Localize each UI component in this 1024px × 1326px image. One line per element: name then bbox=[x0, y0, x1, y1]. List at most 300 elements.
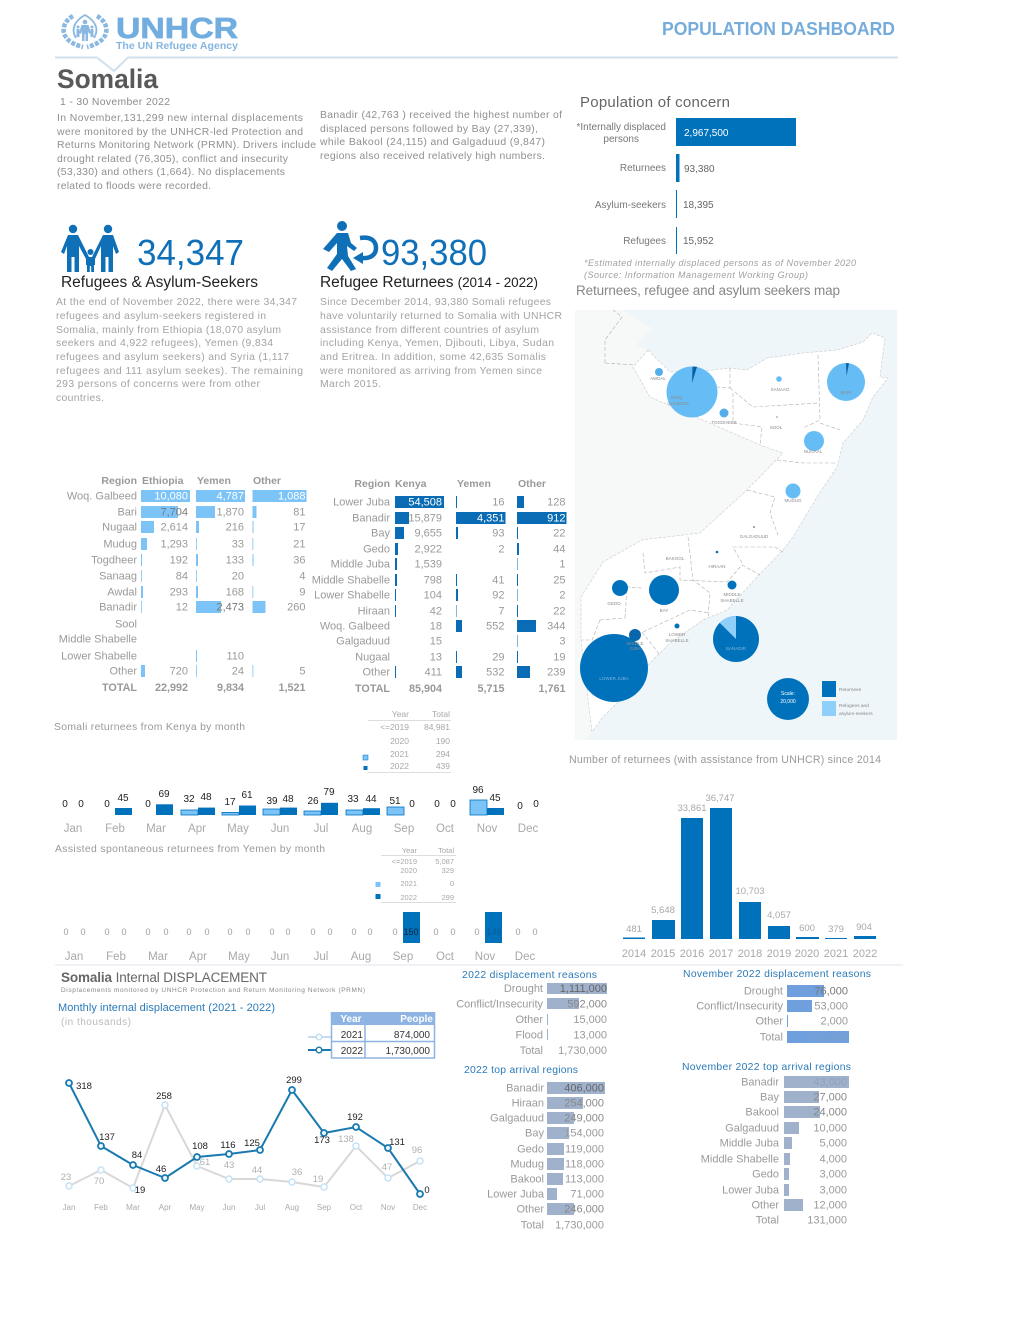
table: Yemen returnee totals: 299 bbox=[441, 893, 454, 902]
labels 2021: 61 bbox=[200, 1157, 210, 1168]
table header: Yemen bbox=[197, 475, 231, 487]
label: Sool bbox=[770, 416, 783, 430]
labels and values: Other bbox=[515, 1014, 543, 1026]
yearly value labels: 10,703 bbox=[735, 886, 765, 897]
text block: returnee description bbox=[319, 297, 562, 390]
bar value labels: 0 bbox=[434, 799, 440, 810]
bar value labels: 0 bbox=[532, 927, 538, 937]
bar value labels: 0 bbox=[121, 927, 127, 937]
text block: displacement summary: (53,330) and others (1,664). No displacements bbox=[57, 167, 285, 178]
table: Kenya returnee totals: 2022 bbox=[390, 761, 409, 771]
values: Ethiopia: 12 bbox=[176, 602, 188, 614]
bubble: Bay: BAY bbox=[660, 608, 668, 613]
region names: Banadir bbox=[352, 512, 390, 524]
chart title: returnees from Kenya: Somali returnees from Kenya by month bbox=[54, 722, 245, 733]
labels and values: Mudug bbox=[510, 1158, 544, 1170]
values: Ethiopia: 192 bbox=[170, 554, 188, 566]
big number: 34,347: 34,347 bbox=[137, 232, 244, 273]
table: Yemen returnee totals: 2022 bbox=[400, 893, 417, 902]
bar value labels: 0 bbox=[245, 927, 251, 937]
map legend: Refugees and bbox=[839, 703, 869, 709]
labels and values bbox=[487, 1082, 604, 1232]
year axis: 2017 bbox=[709, 948, 733, 960]
month axis: May bbox=[228, 951, 250, 963]
values: Yemen: 532 bbox=[486, 666, 504, 678]
bar value labels: 0 bbox=[285, 927, 291, 937]
table: Yemen returnee totals bbox=[376, 846, 456, 902]
values: Other: 19 bbox=[553, 652, 566, 664]
bar value labels: 0 bbox=[450, 799, 456, 810]
bubble: Togdheer: TOGDHEER bbox=[711, 420, 737, 425]
table: Yemen returnee totals: 0 bbox=[450, 879, 454, 888]
bar value labels: 150 bbox=[403, 927, 419, 937]
yearly table: Year bbox=[340, 1014, 362, 1025]
labels 2022: 84 bbox=[132, 1150, 142, 1161]
region names: Other bbox=[362, 666, 390, 678]
bar value labels: 149 bbox=[486, 927, 502, 937]
chart title: returnees since 2014: Number of returnees (with assistance from UNHCR) since 2014 bbox=[569, 754, 881, 766]
labels and values: Total bbox=[756, 1214, 779, 1226]
bars bbox=[787, 985, 849, 1043]
yearly value labels: 904 bbox=[856, 922, 872, 933]
region names: Gedo bbox=[363, 544, 390, 556]
chart title: returnees from Yemen: Assisted spontaneous returnees from Yemen by month bbox=[55, 844, 325, 855]
text block: arrival regions summary: while Bakool (24,115) and Galgaduud (9,847) bbox=[319, 137, 545, 148]
bar: internally displaced persons: persons bbox=[603, 134, 639, 145]
labels 2022: 108 bbox=[192, 1141, 208, 1152]
legend line 2021 bbox=[308, 1034, 331, 1040]
bubble: Middle Shabelle bbox=[720, 580, 744, 603]
bar value labels: 0 bbox=[186, 927, 192, 937]
bars bbox=[784, 1076, 849, 1211]
totals row: 1,761 bbox=[538, 683, 566, 695]
table: Kenya returnee totals bbox=[363, 709, 451, 772]
labels 2021: 70 bbox=[94, 1176, 104, 1187]
month axis: Jan bbox=[65, 951, 83, 963]
bubble: Hiraan: HIRAAN bbox=[708, 564, 726, 569]
region names: Other bbox=[109, 666, 137, 678]
table header bbox=[354, 478, 546, 490]
heading: internal displacement: Somalia Internal DISPLACEMENT bbox=[61, 970, 267, 985]
values: Yemen: 4,351 bbox=[477, 512, 504, 524]
labels and values: Galgaduud bbox=[725, 1122, 779, 1134]
labels and values: 2,000 bbox=[820, 1016, 848, 1028]
labels and values: 10,000 bbox=[813, 1122, 847, 1134]
bar: asylum-seekers: Asylum-seekers bbox=[595, 200, 666, 211]
labels 2021: 19 bbox=[135, 1185, 145, 1196]
text block: returnee description: were monitored as arriving from Yemen since bbox=[319, 366, 542, 377]
bar: refugees bbox=[623, 227, 714, 254]
bubble: Hiraan bbox=[708, 551, 726, 569]
labels 2021: 47 bbox=[382, 1162, 392, 1173]
text block: displacement summary bbox=[56, 113, 316, 192]
values: Ethiopia: 720 bbox=[170, 666, 188, 678]
label: Bakool: BAKOOL bbox=[666, 556, 685, 561]
labels and values: Other bbox=[516, 1204, 544, 1216]
region names: Awdal bbox=[107, 586, 137, 598]
region names: Togdheer bbox=[91, 554, 137, 566]
labels and values: Galgaduud bbox=[490, 1112, 544, 1124]
bar: returnees: 93,380 bbox=[684, 164, 715, 175]
labels 2022: 173 bbox=[314, 1135, 330, 1146]
bar value labels bbox=[63, 927, 538, 937]
totals row bbox=[102, 682, 306, 694]
scale bubble: 20,000 bbox=[780, 699, 796, 705]
region names: Banadir bbox=[99, 602, 137, 614]
month axis: Jun bbox=[271, 951, 289, 963]
month axis: Dec bbox=[413, 1203, 427, 1212]
bar value labels: 45 bbox=[117, 793, 129, 804]
labels and values: Other bbox=[755, 1016, 783, 1028]
bubble: Mudug: MUDUG bbox=[784, 498, 802, 503]
table: Kenya returnee totals: Total bbox=[432, 709, 450, 719]
region names: Sanaag bbox=[99, 570, 137, 582]
values: Other: 44 bbox=[553, 544, 566, 556]
labels and values: 24,000 bbox=[813, 1106, 847, 1118]
bar value labels: 0 bbox=[433, 927, 439, 937]
logo tagline: The UN Refugee Agency bbox=[116, 41, 238, 52]
subheading: PRMN source: Displacements monitored by UNHCR Protection and Return Monitoring Network (PRMN) bbox=[61, 987, 365, 994]
bar value labels: 26 bbox=[307, 796, 319, 807]
labels 2022: 0 bbox=[424, 1185, 430, 1196]
month axis: Feb bbox=[94, 1203, 108, 1212]
table: Kenya returnee totals: Year bbox=[392, 709, 409, 719]
text block: returnee description: assistance from different countries of asylum bbox=[320, 325, 539, 336]
bar value labels: 48 bbox=[200, 792, 212, 803]
labels and values: 1,111,000 bbox=[560, 983, 607, 995]
month axis: Mar bbox=[126, 1203, 140, 1212]
month axis: Aug bbox=[285, 1203, 299, 1212]
year axis: 2021 bbox=[824, 948, 848, 960]
bubble: Lower Juba bbox=[580, 634, 648, 702]
values: Ethiopia bbox=[154, 490, 188, 678]
labels and values: 76,000 bbox=[814, 986, 848, 998]
bar chart: returnees per year bbox=[622, 793, 877, 960]
panel: population of concern bbox=[576, 94, 796, 254]
bubble: Lower Shabelle: LOWER bbox=[669, 632, 686, 637]
month axis: Jul bbox=[255, 1203, 265, 1212]
labels and values: Lower Juba bbox=[487, 1188, 545, 1200]
region names: Woq. Galbeed bbox=[67, 490, 137, 502]
values: Yemen: 133 bbox=[226, 554, 244, 566]
yearly value labels: 5,648 bbox=[651, 905, 675, 916]
values: Other: 9 bbox=[299, 586, 306, 598]
text block: refugee description: At the end of November 2022, there were 34,347 bbox=[56, 297, 297, 308]
values: Yemen: 2 bbox=[498, 544, 504, 556]
legend line 2022 bbox=[308, 1047, 331, 1053]
map legend: Returnees bbox=[839, 687, 862, 693]
yearly table: 1,730,000 bbox=[386, 1046, 430, 1057]
values: Other: 21 bbox=[293, 538, 306, 550]
labels and values: Gedo bbox=[517, 1144, 544, 1156]
chart: 2022 displacement reasons bbox=[456, 970, 607, 1057]
bubble: Woqooyi Galbeed: WOQ. bbox=[671, 395, 683, 400]
month axis: Aug bbox=[351, 951, 371, 963]
text block: refugee description: Somalia, mainly from Ethiopia (18,070 asylum bbox=[56, 325, 281, 336]
labels 2022: 299 bbox=[286, 1075, 302, 1086]
month axis: Jan bbox=[64, 823, 82, 835]
yearly table: 2022 bbox=[341, 1046, 363, 1057]
text block: returnee description: and Eritrea. In addition, some 42,635 Somalis bbox=[320, 352, 546, 363]
labels and values: Bay bbox=[760, 1092, 779, 1104]
bubble: Togdheer bbox=[711, 408, 737, 425]
big number: 93,380: 93,380 bbox=[381, 232, 487, 273]
bubble: Awdal: AWDAL bbox=[650, 376, 666, 381]
table: Yemen returnee totals: 5,087 bbox=[435, 857, 454, 866]
bar value labels: 32 bbox=[183, 794, 195, 805]
text block: displacement summary: were monitored by the UNHCR-led Protection and bbox=[56, 127, 303, 138]
values: Other: 1 bbox=[559, 558, 566, 570]
year axis: 2015 bbox=[651, 948, 675, 960]
values: Other: 1,088 bbox=[278, 490, 306, 502]
year axis: 2018 bbox=[738, 948, 762, 960]
labels and values: Bakool bbox=[510, 1174, 544, 1186]
bar chart: Kenya returnees by month bbox=[62, 785, 539, 835]
table header: Region bbox=[101, 475, 137, 487]
bubble: Nugaal bbox=[804, 431, 824, 454]
month axis: Nov bbox=[381, 1203, 395, 1212]
bar: asylum-seekers: 18,395 bbox=[683, 200, 714, 211]
table: Kenya returnee totals: 294 bbox=[436, 749, 450, 759]
month axis: Aug bbox=[352, 823, 372, 835]
month axis: Apr bbox=[188, 823, 206, 835]
labels and values: Conflict/Insecurity bbox=[456, 998, 543, 1010]
labels 2021: 96 bbox=[412, 1145, 422, 1156]
values: Kenya: 54,508 bbox=[408, 496, 442, 508]
bar chart: Yemen returnees by month bbox=[63, 912, 538, 963]
month axis: Oct bbox=[436, 823, 455, 835]
bubble: Middle Juba: JUBA bbox=[629, 646, 641, 651]
scale bubble bbox=[767, 678, 809, 720]
region names: Middle Shabelle bbox=[59, 634, 137, 646]
bar value labels: 0 bbox=[104, 927, 110, 937]
bar value labels: 0 bbox=[450, 927, 456, 937]
values: Yemen: 1,870 bbox=[216, 506, 244, 518]
values: Yemen: 168 bbox=[226, 586, 244, 598]
labels and values: 13,000 bbox=[573, 1030, 607, 1042]
text block: displacement summary: In November,131,299 new internal displacements bbox=[57, 113, 303, 124]
bubble: Lower Shabelle: SHABELLE bbox=[665, 638, 689, 643]
labels and values: 254,000 bbox=[564, 1098, 604, 1110]
values: Other: 3 bbox=[559, 636, 566, 648]
chart title: 2022 top arrival regions bbox=[464, 1065, 578, 1076]
month axis: Oct bbox=[436, 951, 455, 963]
bar value labels: 48 bbox=[282, 794, 294, 805]
bubble: Woqooyi Galbeed: GALBEED bbox=[667, 401, 689, 406]
heading: refugee returnees: Refugee Returnees (2014 - 2022) bbox=[320, 274, 538, 291]
text block: returnee description: have voluntarily returned to Somalia with UNHCR bbox=[320, 311, 562, 322]
labels and values: Banadir bbox=[506, 1082, 544, 1094]
labels 2021: 43 bbox=[224, 1160, 234, 1171]
labels and values: 406,000 bbox=[564, 1082, 604, 1094]
region names: Nugaal bbox=[355, 652, 390, 664]
region names bbox=[312, 496, 391, 678]
values: Kenya: 9,655 bbox=[414, 528, 442, 540]
bubble: Middle Juba: MIDDLE bbox=[626, 641, 644, 646]
month axis: Sep bbox=[393, 951, 413, 963]
table: Kenya returnee totals: 439 bbox=[436, 761, 450, 771]
labels 2022: 125 bbox=[244, 1138, 260, 1149]
year axis: 2022 bbox=[853, 948, 877, 960]
values: Kenya: 798 bbox=[424, 574, 442, 586]
values: Yemen: 4,787 bbox=[216, 490, 244, 502]
labels and values bbox=[701, 1076, 847, 1226]
labels and values: 4,000 bbox=[819, 1154, 847, 1166]
text block: refugee description bbox=[56, 297, 303, 404]
values: Yemen: 16 bbox=[492, 496, 504, 508]
values: Yemen: 93 bbox=[492, 528, 504, 540]
bar: returnees: Returnees bbox=[620, 163, 666, 174]
month axis: Jan bbox=[63, 1203, 75, 1212]
bubble: Bari bbox=[827, 363, 865, 401]
yearly value labels: 600 bbox=[799, 923, 815, 934]
text block: refugee description: refugees and asylum seekers) and Syria (1,117 bbox=[56, 352, 289, 363]
labels and values: Drought bbox=[744, 986, 783, 998]
labels and values: Hiraan bbox=[512, 1098, 544, 1110]
values: Yemen bbox=[477, 496, 504, 678]
text block: returnee description: March 2015. bbox=[320, 379, 381, 390]
totals row: 22,992 bbox=[155, 682, 188, 694]
values: Yemen: 2,473 bbox=[216, 602, 244, 614]
panel: refugees and asylum-seekers bbox=[56, 225, 303, 404]
map legend bbox=[822, 681, 873, 717]
dashboard title: POPULATION DASHBOARD bbox=[662, 19, 895, 39]
chart: 2022 top arrival regions bbox=[464, 1065, 605, 1232]
bar value labels: 44 bbox=[365, 794, 377, 805]
month axis: May bbox=[227, 823, 249, 835]
footnote: estimates source: (Source: Information Management Working Group) bbox=[584, 270, 808, 280]
date range: 1 - 30 November 2022 bbox=[60, 97, 170, 108]
map legend: asylum-seekers bbox=[839, 711, 873, 717]
bar value labels: 0 bbox=[163, 927, 169, 937]
values: Kenya bbox=[408, 496, 442, 678]
bar value labels: 0 bbox=[227, 927, 233, 937]
icon: family bbox=[61, 225, 119, 272]
labels and values bbox=[456, 983, 607, 1057]
values: Yemen: 92 bbox=[492, 590, 504, 602]
bar value labels: 0 bbox=[63, 927, 69, 937]
table: Yemen returnee totals: 2021 bbox=[400, 879, 417, 888]
values: Yemen bbox=[216, 490, 244, 678]
month axis: May bbox=[189, 1203, 205, 1212]
labels and values: 249,000 bbox=[564, 1112, 604, 1124]
bar value labels: 51 bbox=[389, 796, 401, 807]
labels 2021: 19 bbox=[313, 1174, 323, 1185]
labels and values: 592,000 bbox=[567, 998, 607, 1010]
month axis: Mar bbox=[146, 823, 166, 835]
bubble: Sanaag: SANAAG bbox=[771, 387, 790, 392]
logo wordmark: UNHCR bbox=[116, 13, 238, 45]
values: Kenya: 2,922 bbox=[414, 544, 442, 556]
labels and values: 27,000 bbox=[813, 1092, 847, 1104]
labels and values: 246,000 bbox=[564, 1204, 604, 1216]
region names: Middle Juba bbox=[331, 558, 391, 570]
labels and values: 154,000 bbox=[564, 1128, 604, 1140]
values: Yemen: 33 bbox=[232, 538, 244, 550]
line 2022 bbox=[66, 1080, 423, 1197]
labels and values: 53,000 bbox=[814, 1000, 848, 1012]
region names: Bari bbox=[117, 506, 137, 518]
values: Yemen: 41 bbox=[492, 574, 504, 586]
region names: Lower Shabelle bbox=[314, 590, 390, 602]
bar: refugees: 15,952 bbox=[683, 236, 714, 247]
text block: displacement summary: drought related (76,305), conflict and insecurity bbox=[57, 154, 289, 165]
yearly table: People bbox=[400, 1014, 433, 1025]
bar value labels: 61 bbox=[241, 790, 253, 801]
chart title: monthly displacement: Monthly internal displacement (2021 - 2022) bbox=[58, 1002, 275, 1014]
bar value labels: 0 bbox=[204, 927, 210, 937]
values: Kenya: 1,539 bbox=[414, 558, 442, 570]
yearly value labels: 379 bbox=[828, 924, 844, 935]
scale bubble: Scale: bbox=[781, 691, 795, 697]
bar value labels: 39 bbox=[266, 796, 278, 807]
bubble: Awdal bbox=[650, 368, 666, 381]
bar value labels: 45 bbox=[489, 793, 501, 804]
bar: internally displaced persons: 2,967,500 bbox=[684, 128, 729, 139]
labels and values: 12,000 bbox=[813, 1200, 847, 1212]
table: Yemen returnee totals: 329 bbox=[441, 866, 454, 875]
table header: Other bbox=[518, 478, 546, 490]
year axis: 2020 bbox=[795, 948, 819, 960]
month axis bbox=[64, 823, 538, 835]
labels and values: 1,730,000 bbox=[558, 1045, 607, 1057]
table header: Region bbox=[354, 478, 390, 490]
labels 2022: 137 bbox=[99, 1132, 115, 1143]
month axis: Jun bbox=[223, 1203, 235, 1212]
values: Other: 17 bbox=[293, 522, 306, 534]
chart title: November 2022 top arrival regions bbox=[682, 1062, 851, 1073]
footnote: estimates source: *Estimated internally displaced persons as of November 2020 bbox=[584, 258, 856, 268]
text block: returnee description: Since December 2014, 93,380 Somali refugees bbox=[320, 297, 551, 308]
table: Yemen returnee totals: Year bbox=[402, 846, 418, 855]
totals row: 85,904 bbox=[409, 683, 442, 695]
bubble: Middle Shabelle: MIDDLE bbox=[723, 592, 741, 597]
bars 2022 bbox=[115, 803, 504, 815]
bar: asylum-seekers bbox=[595, 190, 714, 218]
values: Yemen: 29 bbox=[492, 652, 504, 664]
labels and values: Other bbox=[751, 1200, 779, 1212]
values: Yemen: 110 bbox=[226, 650, 244, 662]
labels 2022: 131 bbox=[389, 1137, 405, 1148]
table and legend: yearly displacement bbox=[308, 1012, 435, 1058]
labels and values: 113,000 bbox=[565, 1174, 604, 1186]
bar value labels: 0 bbox=[409, 799, 415, 810]
labels 2021: 36 bbox=[292, 1167, 302, 1178]
yearly value labels: 36,747 bbox=[705, 793, 735, 804]
labels and values: Lower Juba bbox=[722, 1184, 780, 1196]
line 2021 bbox=[66, 1102, 423, 1191]
bar value labels: 0 bbox=[62, 799, 68, 810]
table: Yemen returnee totals: Total bbox=[438, 846, 454, 855]
text block: refugee description: seekers and 4,922 refugees), Yemen (9,834 bbox=[56, 338, 273, 349]
table: refugees by region and origin bbox=[59, 475, 306, 694]
month axis: Jul bbox=[314, 951, 328, 963]
month axis: Apr bbox=[159, 1203, 172, 1212]
values: Other: 260 bbox=[287, 602, 306, 614]
labels and values: Gedo bbox=[752, 1168, 779, 1180]
bars 2022 bbox=[403, 912, 502, 943]
bar value labels: 0 bbox=[310, 927, 316, 937]
values: Other: 344 bbox=[547, 620, 566, 632]
header: UNHCR logo bbox=[64, 13, 238, 52]
bars bbox=[547, 1082, 605, 1215]
labels and values: 118,000 bbox=[565, 1158, 604, 1170]
values: Other: 4 bbox=[299, 570, 306, 582]
text block: arrival regions summary: Banadir (42,763 ) received the highest number of bbox=[320, 110, 562, 121]
labels and values: 71,000 bbox=[570, 1188, 604, 1200]
labels 2022: 192 bbox=[347, 1112, 363, 1123]
text block: displacement summary: related to floods were recorded. bbox=[57, 181, 211, 192]
